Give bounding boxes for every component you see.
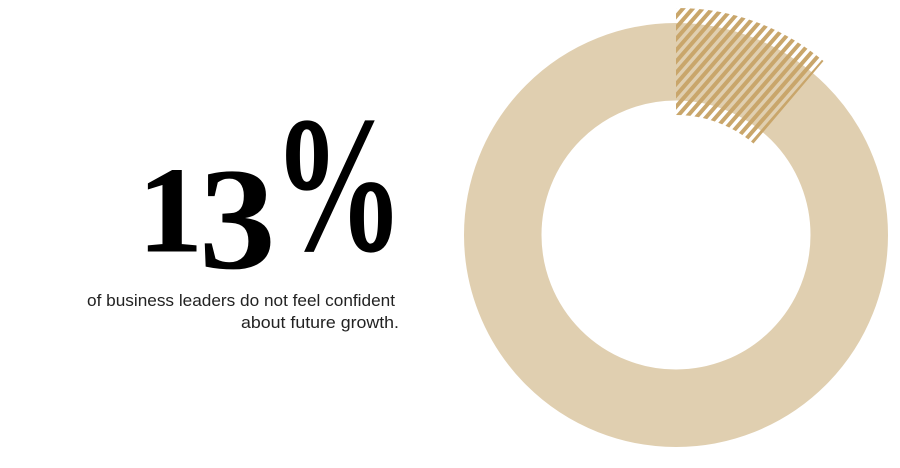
caption text: about future growth. bbox=[241, 313, 399, 332]
big statistic: 13%: 3 bbox=[199, 139, 276, 300]
big statistic: 13%: % bbox=[273, 77, 404, 292]
big statistic: 13% bbox=[138, 77, 404, 300]
caption text: of business leaders do not feel confident bbox=[87, 291, 395, 310]
donut ring: remaining 87% bbox=[503, 62, 849, 408]
donut chart bbox=[503, 0, 849, 408]
big statistic: 13%: 1 bbox=[138, 143, 203, 278]
caption text bbox=[87, 291, 399, 332]
hatched segment: 13% bbox=[665, 0, 790, 103]
